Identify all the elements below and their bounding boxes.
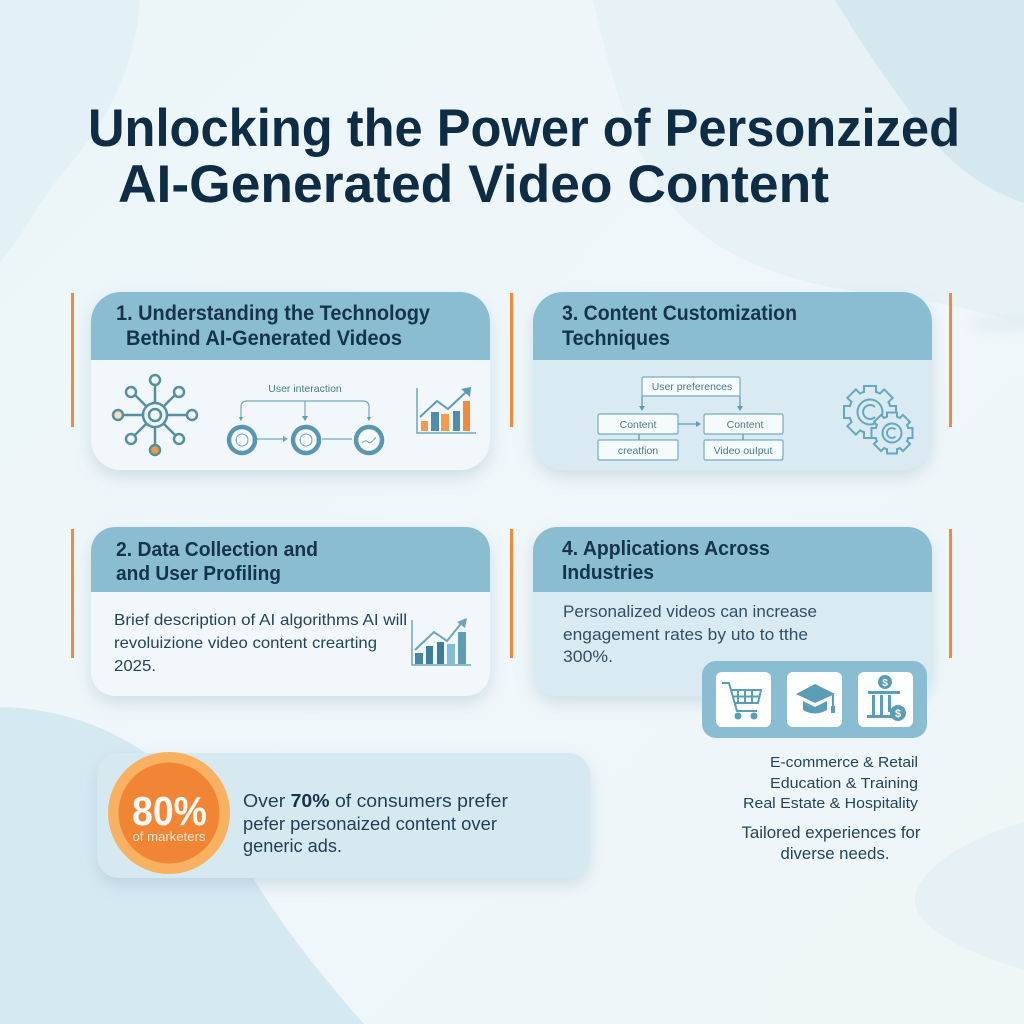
description text <box>563 602 817 666</box>
badge: 80% of marketers: of marketers <box>132 830 206 844</box>
icon: bank with coins: $ <box>895 708 901 720</box>
flow diagram: user preferences: creatfion <box>618 445 658 457</box>
industries list: E-commerce & Retail <box>770 754 918 771</box>
callout text: generic ads. <box>243 835 342 856</box>
industries list: Real Estate & Hospitality <box>743 795 919 812</box>
tailored experiences caption: Tailored experiences for <box>742 824 921 842</box>
heading 3 <box>562 302 797 350</box>
panel 3: customization <box>533 292 932 470</box>
flow diagram: user preferences: Video ouIput <box>714 445 772 457</box>
flow diagram: user preferences: Content <box>620 419 656 431</box>
description text: Brief description of AI algorithms AI will <box>114 612 407 629</box>
flow diagram: user preferences: User preferences <box>652 381 732 393</box>
icon: graduation cap <box>796 684 835 714</box>
icon: bar chart with arrow <box>417 387 476 433</box>
badge: 80% of marketers <box>108 752 230 874</box>
heading 4: Industries <box>562 562 654 584</box>
description text: 2025. <box>114 658 156 675</box>
industries list <box>743 754 919 812</box>
heading 2: and User Profiling <box>116 563 281 585</box>
heading 4: 4. Applications Across <box>562 538 770 560</box>
flow diagram: user preferences <box>598 377 783 460</box>
callout: statistic <box>97 752 590 878</box>
heading 2 <box>116 539 318 585</box>
description text: engagement rates by uto to tthe <box>563 625 808 644</box>
title: Unlocking the Power of Personzized <box>88 99 960 158</box>
heading 3: 3. Content Customization <box>562 302 797 325</box>
icon: gears <box>845 387 912 452</box>
industry icon strip <box>702 661 927 738</box>
industries list: Education & Training <box>770 775 918 792</box>
heading 3: Techniques <box>562 327 670 350</box>
description text <box>114 612 407 675</box>
title <box>88 99 960 214</box>
description text: 300%. <box>563 647 613 666</box>
description text: Personalized videos can increase <box>563 602 817 621</box>
title: AI-Generated Video Content <box>118 155 829 214</box>
callout text: pefer personaized content over <box>243 813 497 834</box>
panel 2: data collection <box>91 527 490 696</box>
heading 1: Bethind AI-Generated Videos <box>126 327 402 350</box>
heading 2: 2. Data Collection and <box>116 539 318 561</box>
panel 4: applications <box>533 527 932 696</box>
icon: bank with coins <box>867 675 906 721</box>
tailored experiences caption: diverse needs. <box>780 845 890 863</box>
callout text <box>243 790 508 856</box>
icon: network hub <box>113 375 197 455</box>
flow diagram: user interaction: User interaction <box>268 383 342 395</box>
icon: shopping cart <box>722 683 761 718</box>
icon: bank with coins: $ <box>882 678 888 689</box>
callout text: Over 70% of consumers prefer <box>243 790 508 811</box>
description text: revoluizione video content crearting <box>114 635 377 652</box>
panel 1: technology <box>91 292 490 470</box>
heading 4 <box>562 538 770 584</box>
flow diagram: user interaction <box>229 383 382 453</box>
icon: growth chart <box>412 618 471 665</box>
badge: 80% of marketers: 80% <box>132 788 207 834</box>
heading 1 <box>116 302 430 350</box>
heading 1: 1. Understanding the Technology <box>116 302 430 325</box>
tailored experiences caption <box>742 824 921 863</box>
accent bars <box>71 293 952 658</box>
flow diagram: user preferences: Content <box>727 419 763 431</box>
